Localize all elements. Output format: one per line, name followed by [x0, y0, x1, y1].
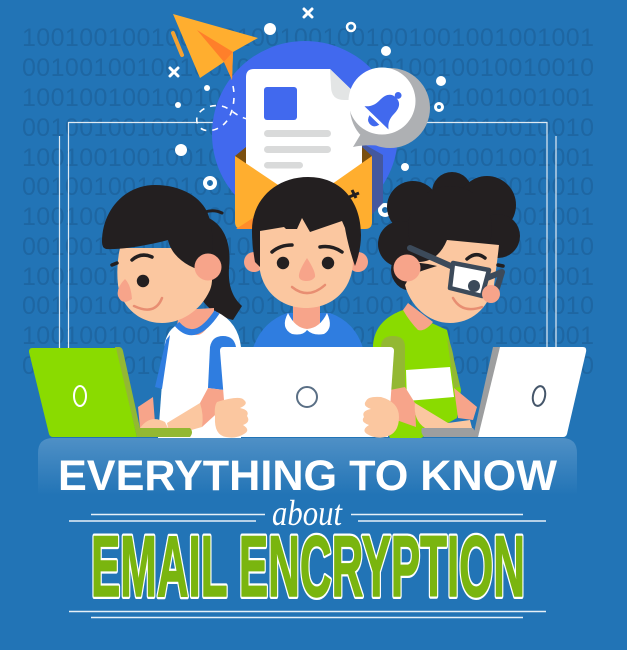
icon: bell	[358, 81, 413, 136]
shirt	[158, 312, 241, 438]
heading: about: about	[272, 493, 343, 533]
decorative dots and marks	[170, 9, 446, 215]
character: center boy	[244, 177, 368, 348]
ears	[244, 252, 264, 272]
binary code background: 0010010010010010010010010010010010010010	[22, 54, 594, 82]
binary code background	[22, 24, 594, 380]
binary code background: 1001001001001001001001001001001001001001	[22, 24, 594, 52]
neck	[293, 300, 320, 330]
glasses	[410, 248, 502, 296]
heading: everything to know: EVERYTHING TO KNOW	[58, 452, 557, 500]
binary code background: 1001001001001001001001001001001001001001	[22, 203, 594, 231]
face	[117, 248, 212, 323]
face	[405, 240, 499, 323]
hair	[252, 177, 361, 267]
neck	[177, 308, 214, 335]
character: right boy	[373, 172, 520, 438]
sleeves	[381, 336, 405, 390]
hands on center laptop	[215, 397, 399, 438]
arms	[388, 387, 416, 427]
chest band	[406, 367, 454, 401]
green laptop	[29, 347, 192, 437]
smile	[292, 285, 325, 293]
binary code background: 1001001001001001001001001001001001001001	[22, 322, 594, 350]
binary code background: 0010010010010010010010010010010010010010	[22, 114, 594, 142]
binary code background: 1001001001001001001001001001001001001001	[22, 84, 594, 112]
binary code background: 1001001001001001001001001001001001001001	[22, 263, 594, 291]
shirt	[253, 313, 363, 348]
title panel	[38, 438, 577, 495]
dashed flight path	[197, 86, 247, 131]
face	[259, 215, 353, 308]
nose	[118, 279, 132, 302]
bell notification bubble	[348, 68, 430, 148]
document icon	[246, 69, 362, 205]
neck	[403, 303, 433, 330]
binary code background: 0010010010010010010010010010010010010010	[22, 173, 594, 201]
envelope shadow	[362, 143, 383, 225]
paper plane icon	[173, 14, 258, 80]
shirt	[373, 310, 461, 438]
binary code background: 1001001001001001001001001001001001001001	[22, 144, 594, 172]
right laptop	[421, 347, 586, 437]
blue circle behind document	[212, 41, 398, 227]
collar	[285, 313, 330, 334]
smile	[134, 298, 162, 310]
nose	[299, 258, 315, 281]
center laptop	[220, 347, 394, 437]
character: left girl	[102, 185, 242, 438]
front hair	[102, 185, 212, 272]
binary code background: 0010010010010010010010010010010010010010	[22, 292, 594, 320]
nose	[482, 285, 500, 303]
smile	[453, 298, 482, 309]
envelope back	[235, 147, 372, 220]
back hair	[200, 215, 242, 320]
hair back	[378, 172, 520, 291]
envelope front	[235, 156, 372, 229]
binary code background: 0010010010010010010010010010010010010010	[22, 352, 594, 380]
binary code background: 0010010010010010010010010010010010010010	[22, 233, 594, 261]
arm	[200, 388, 226, 427]
